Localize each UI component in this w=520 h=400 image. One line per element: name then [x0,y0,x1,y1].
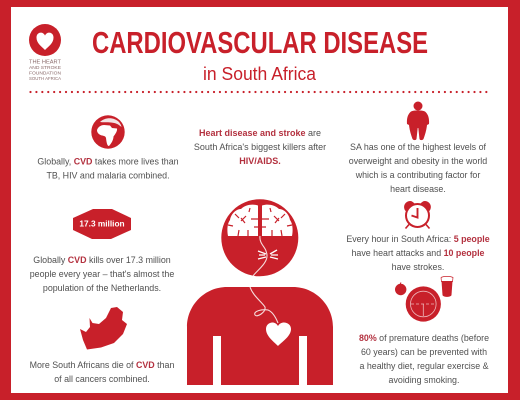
text: cancers: of all cancers combined. [54,374,150,384]
heart [266,322,291,346]
text: 17.3 million people: people every year – that's almost the [30,269,174,279]
body [187,287,333,385]
text: heart disease and stroke: South Africa's biggest killers after [194,142,326,152]
nerve line [253,236,267,276]
text: 17.3 million people: population of the Netherlands. [43,283,161,293]
brain [227,205,293,236]
logo: AND STROKE [29,65,61,70]
text: heart disease and stroke: HIV/AIDS. [239,156,281,166]
text: obesity: heart disease. [390,184,446,194]
text: globally CVD: Globally, CVD takes more lives than [37,156,179,166]
text: 17.3 million people: Globally CVD kills over 17.3 million [33,255,171,265]
nerve to heart [250,287,278,323]
rupture sparks [258,250,278,259]
badge: 17.3 million: 17.3 million [79,218,125,228]
logo: SOUTH AFRICA [29,76,61,81]
text: every hour: have strokes. [392,262,444,272]
badge: 17.3 million [73,209,131,239]
logo [29,24,61,81]
text: 80 percent: a healthy diet, regular exercise & [359,361,489,371]
text: 80 percent: avoiding smoking. [389,375,459,385]
text: globally CVD: TB, HIV and malaria combined. [46,170,170,180]
text: every hour: Every hour in South Africa: 5 people [346,234,490,244]
logo: THE HEART [29,60,61,66]
icon: alarm clock [404,201,431,228]
person figure [187,199,333,385]
text: cancers: More South Africans die of CVD than [30,360,174,370]
text: obesity: SA has one of the highest levels of [350,142,487,152]
text: obesity: which is a contributing factor for [355,170,480,180]
text: every hour: have heart attacks and 10 people [352,248,484,258]
icon: South Africa map [80,307,127,350]
subtitle: in South Africa [203,64,317,84]
text: 80 percent: 60 years) can be prevented with [361,347,487,357]
icon: globe [91,115,125,149]
title: CARDIOVASCULAR DISEASE [92,25,428,60]
icon: overweight person [407,102,429,140]
icon: healthy diet [395,276,453,322]
logo: FOUNDATION [29,70,61,76]
text: obesity: overweight and obesity in the world [349,156,487,166]
text: heart disease and stroke: Heart disease and stroke are [199,128,321,138]
head [221,199,298,276]
text: 80 percent: 80% of premature deaths (before [359,333,489,343]
